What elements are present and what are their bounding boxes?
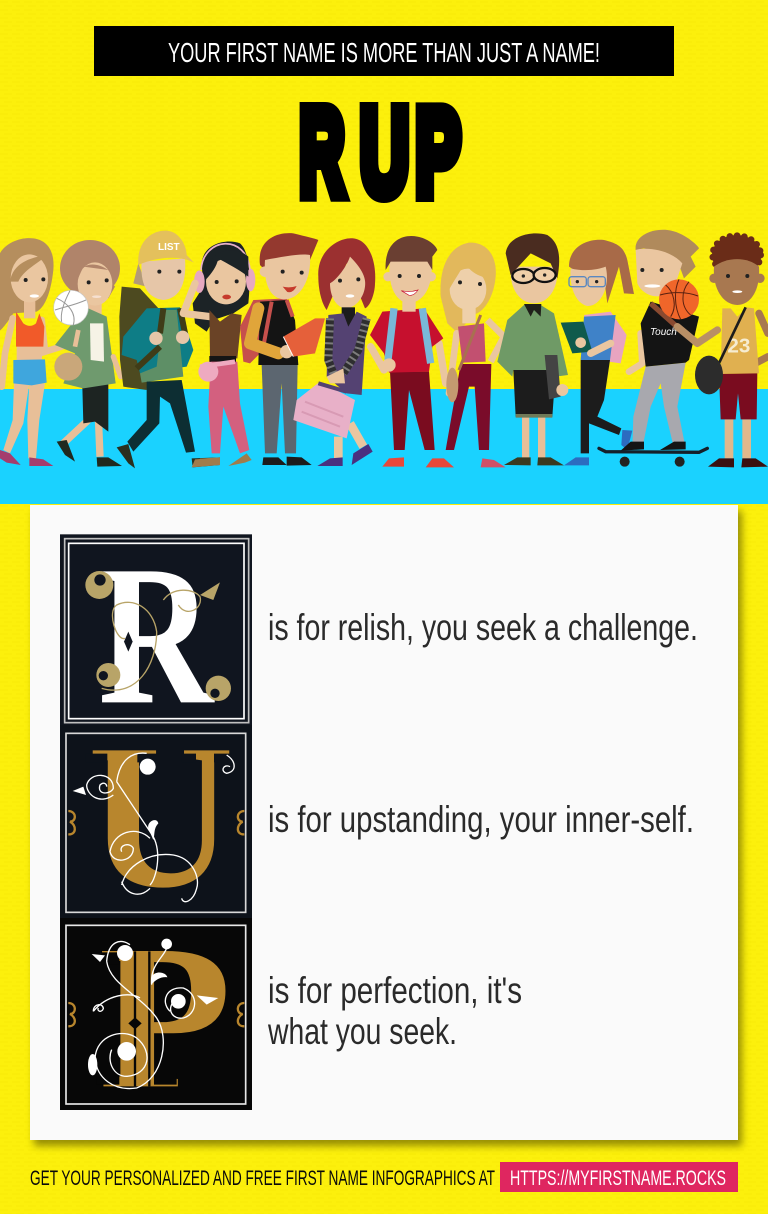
- person 2: girl with volleyball: [54, 240, 122, 467]
- letter tile R: R: [98, 525, 215, 746]
- title: name: R: [300, 84, 344, 220]
- person 11: skateboarder with basketball: [599, 230, 717, 467]
- person 9: boy with glasses and green sweater: [497, 233, 568, 465]
- blue floor band: [0, 389, 768, 504]
- person 1: girl in orange top: [0, 238, 77, 466]
- person 4: girl with pink headphones: [183, 242, 255, 467]
- header banner: [94, 26, 674, 76]
- letter tile P: [60, 902, 252, 1131]
- white content panel: [30, 505, 742, 1146]
- text: letter P: what you seek.: [267, 1011, 457, 1052]
- person 12: boy in jersey with curly hair: 23: [727, 335, 750, 358]
- person 11: skateboarder with basketball: Touch: [650, 327, 677, 338]
- person 7: boy in red shirt: [370, 236, 454, 467]
- title: name: [300, 84, 460, 220]
- group of twelve people: [0, 230, 768, 468]
- person 8: blonde girl: [440, 243, 506, 467]
- text: letter P: is for perfection, it's: [268, 970, 522, 1011]
- letter tile P: P: [98, 902, 232, 1131]
- person 6: girl with pink handbag: [293, 238, 375, 466]
- title: name: U: [360, 84, 409, 220]
- person 5: boy reading orange book: [240, 233, 325, 466]
- person 10: girl with ponytail and tablet: [561, 240, 634, 465]
- people right half: [370, 230, 768, 467]
- people left half: [0, 231, 375, 468]
- person 3: hiker with backpack and cap: LIST: [158, 242, 180, 253]
- text: letter P: [267, 970, 522, 1052]
- person 3: hiker with backpack and cap: [117, 231, 220, 468]
- letter tile U: U: [88, 702, 234, 931]
- person 12: boy in jersey with curly hair: [695, 235, 768, 467]
- footer: GET YOUR PERSONALIZED AND FREE FIRST NAME INFOGRAPHICS AT: [30, 1167, 495, 1190]
- title: name: P: [416, 84, 460, 220]
